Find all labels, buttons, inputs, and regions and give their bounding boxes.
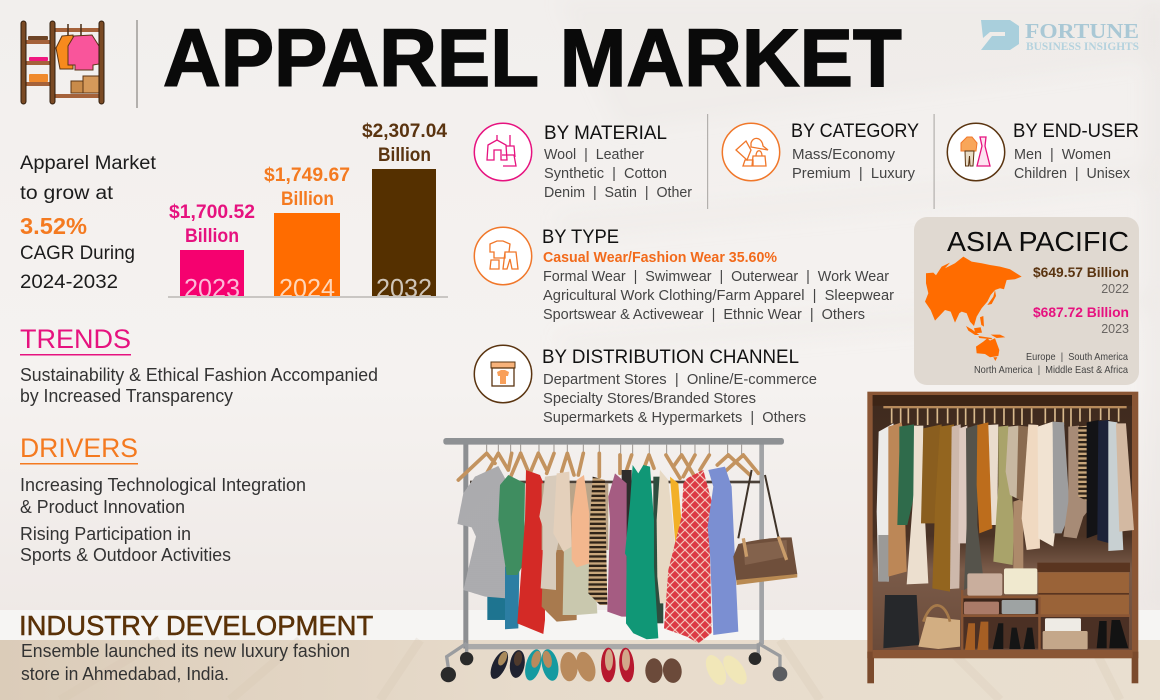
wardrobe frame bbox=[867, 392, 1138, 683]
by distribution channel: BY DISTRIBUTION CHANNEL bbox=[542, 347, 799, 368]
by type: Casual Wear/Fashion Wear 35.60% bbox=[543, 250, 777, 266]
by material: Denim | Satin | Other bbox=[544, 184, 692, 201]
drivers bbox=[20, 433, 306, 565]
logo: FORTUNE bbox=[1025, 19, 1139, 43]
panel: asia pacific bbox=[914, 217, 1139, 385]
drivers: Sports & Outdoor Activities bbox=[20, 544, 231, 565]
by type: Sportswear & Activewear | Ethnic Wear | Others bbox=[543, 306, 865, 323]
clothes rack bbox=[441, 438, 797, 688]
by distribution channel bbox=[474, 345, 817, 426]
by distribution channel: Specialty Stores/Branded Stores bbox=[543, 390, 756, 407]
panel: asia pacific: 2022 bbox=[1101, 282, 1129, 296]
panel: asia pacific: $649.57 Billion bbox=[1033, 264, 1129, 280]
trends: TRENDS bbox=[20, 324, 131, 354]
hangers bbox=[458, 445, 758, 480]
industry development bbox=[19, 610, 373, 684]
bar 2024 bbox=[264, 165, 350, 303]
bar 2024: 2024 bbox=[279, 273, 335, 303]
by end-user: Children | Unisex bbox=[1014, 165, 1130, 182]
logo: BUSINESS INSIGHTS bbox=[1026, 41, 1139, 53]
by end-user bbox=[947, 121, 1139, 182]
by type bbox=[474, 227, 894, 323]
bar chart bbox=[168, 121, 448, 303]
drivers: Increasing Technological Integration bbox=[20, 474, 306, 495]
drivers: & Product Innovation bbox=[20, 496, 185, 517]
icon: price tag and hat bbox=[722, 123, 780, 181]
drivers: DRIVERS bbox=[20, 433, 138, 463]
by end-user: Men | Women bbox=[1014, 146, 1111, 163]
by type: Formal Wear | Swimwear | Outerwear | Work Wear bbox=[543, 268, 889, 285]
trends bbox=[20, 324, 378, 406]
by material: BY MATERIAL bbox=[544, 123, 667, 144]
by distribution channel: Supermarkets & Hypermarkets | Others bbox=[543, 409, 806, 426]
header divider bbox=[136, 20, 138, 108]
bar 2023: $1,700.52 bbox=[169, 202, 255, 223]
industry development: store in Ahmedabad, India. bbox=[21, 663, 229, 684]
icon: clothes shelf bbox=[21, 21, 104, 104]
panel: asia pacific: ASIA PACIFIC bbox=[947, 226, 1129, 257]
icon: storefront bbox=[474, 345, 532, 403]
bar 2024: $1,749.67 bbox=[264, 165, 350, 186]
handbag bbox=[733, 470, 797, 585]
bar 2024: Billion bbox=[281, 189, 334, 210]
by type: BY TYPE bbox=[542, 227, 619, 248]
by material: Synthetic | Cotton bbox=[544, 165, 667, 182]
bar 2023: Billion bbox=[185, 226, 239, 247]
bar 2032: Billion bbox=[378, 145, 431, 166]
bags bbox=[883, 595, 960, 649]
shelves and drawers bbox=[873, 563, 1133, 658]
by category: Premium | Luxury bbox=[792, 165, 915, 182]
icon: shirt and trousers bbox=[474, 227, 532, 285]
wardrobe bbox=[867, 392, 1138, 683]
by distribution channel: Department Stores | Online/E-commerce bbox=[543, 371, 817, 388]
icon: suit and dress bbox=[947, 123, 1005, 181]
by material bbox=[474, 123, 692, 201]
growth summary: 2024-2032 bbox=[20, 272, 118, 293]
bar 2032: $2,307.04 bbox=[362, 121, 447, 142]
bar 2023 bbox=[169, 202, 255, 303]
shoes bbox=[487, 647, 751, 688]
by type: Agricultural Work Clothing/Farm Apparel | Sleepwear bbox=[543, 287, 894, 304]
trends: Sustainability & Ethical Fashion Accompanied bbox=[20, 364, 378, 385]
panel: asia pacific: 2023 bbox=[1101, 322, 1129, 336]
bar 2032: 2032 bbox=[376, 273, 432, 303]
growth summary: 3.52% bbox=[20, 213, 87, 239]
panel: asia pacific: $687.72 Billion bbox=[1033, 304, 1129, 320]
growth summary: Apparel Market bbox=[20, 153, 157, 174]
map: asia pacific bbox=[925, 257, 1022, 361]
hanging clothes bbox=[877, 420, 1134, 592]
by category: Mass/Economy bbox=[792, 146, 895, 163]
growth summary bbox=[20, 153, 157, 293]
bar 2032 bbox=[362, 121, 447, 303]
growth summary: CAGR During bbox=[20, 243, 135, 264]
by material: Wool | Leather bbox=[544, 146, 644, 163]
garments bbox=[457, 465, 738, 643]
logo bbox=[981, 19, 1139, 53]
panel: asia pacific: Europe | South America bbox=[1026, 351, 1128, 363]
by category: BY CATEGORY bbox=[791, 121, 919, 142]
by end-user: BY END-USER bbox=[1013, 121, 1139, 142]
industry development: INDUSTRY DEVELOPMENT bbox=[19, 610, 373, 641]
rack frame bbox=[441, 438, 787, 682]
bar 2023: 2023 bbox=[184, 273, 240, 303]
industry development: Ensemble launched its new luxury fashion bbox=[21, 640, 350, 661]
section dividers bbox=[707, 114, 935, 209]
by category bbox=[722, 121, 919, 182]
growth summary: to grow at bbox=[20, 183, 114, 204]
trends: by Increased Transparency bbox=[20, 385, 234, 406]
drivers: Rising Participation in bbox=[20, 523, 191, 544]
title: APPAREL MARKET bbox=[163, 13, 902, 104]
icon: garments bbox=[474, 123, 532, 181]
panel: asia pacific: North America | Middle East & Africa bbox=[974, 364, 1128, 376]
